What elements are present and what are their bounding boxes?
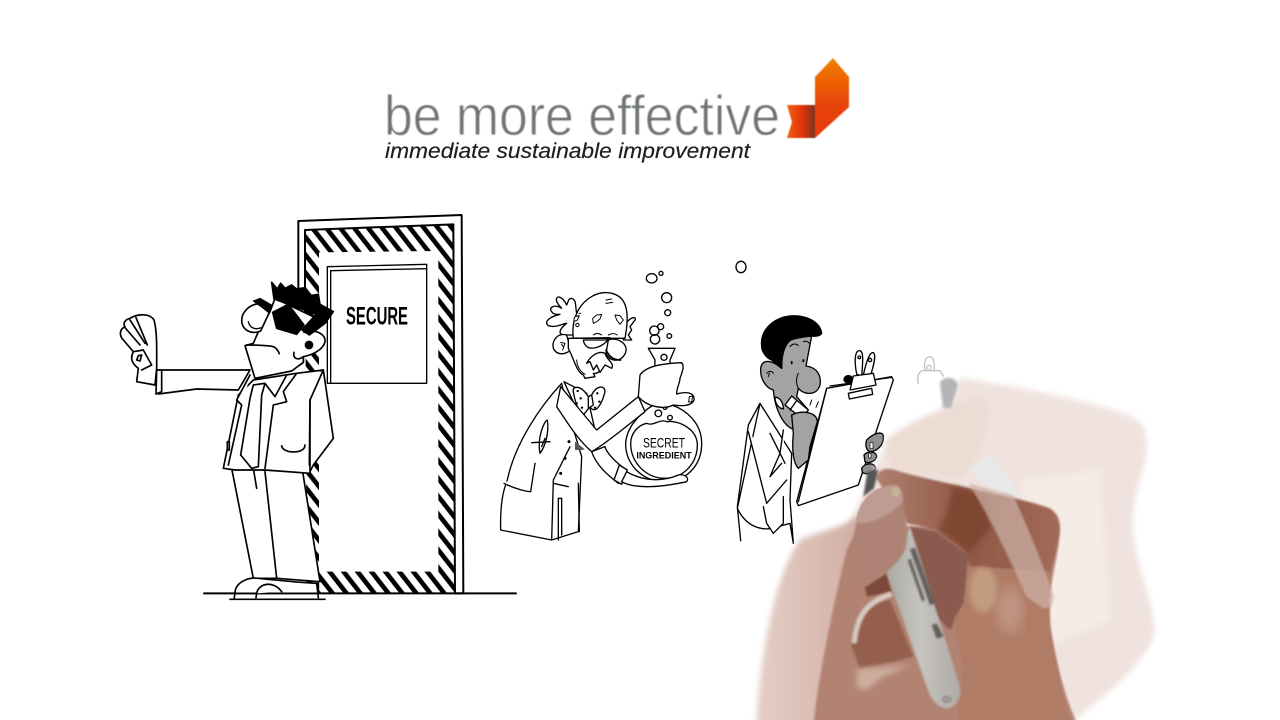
hand at mouth bbox=[792, 412, 817, 468]
ghost finger overlay bbox=[968, 483, 1054, 608]
door frame bbox=[298, 215, 463, 593]
hazard stripes bbox=[305, 224, 455, 593]
hair left bbox=[547, 297, 577, 335]
raised hand bbox=[120, 315, 157, 385]
shadow under thumb bbox=[865, 573, 892, 597]
secure sign: SECURE bbox=[346, 302, 408, 330]
scientist with flask bbox=[501, 261, 746, 540]
body and shirt bbox=[737, 403, 793, 543]
ghost marker bbox=[968, 455, 1020, 495]
guard head bbox=[242, 282, 333, 378]
mustache bbox=[587, 352, 612, 372]
lab coat bbox=[501, 383, 585, 540]
tie bbox=[241, 383, 265, 468]
nose bbox=[242, 304, 270, 332]
collar lapel bbox=[228, 373, 297, 468]
hair bbox=[272, 282, 333, 335]
collar bbox=[564, 382, 595, 430]
arm holding flask bbox=[557, 363, 694, 487]
logo tagline: immediate sustainable improvement bbox=[385, 139, 751, 163]
dark crease bbox=[938, 487, 990, 552]
mouth bbox=[247, 345, 279, 354]
extended arm bbox=[157, 370, 250, 394]
facial details bbox=[767, 341, 809, 388]
head and bow tie bbox=[547, 293, 635, 430]
nose bbox=[606, 339, 626, 360]
thumb bbox=[853, 485, 907, 587]
bow tie bbox=[573, 387, 605, 415]
ear bbox=[294, 331, 325, 365]
eyebrow bbox=[253, 298, 272, 312]
logo ribbon icon bbox=[787, 58, 849, 138]
bald dome bbox=[573, 293, 627, 338]
lower right palm bbox=[953, 567, 1070, 720]
flask label: SECRET bbox=[643, 434, 685, 450]
arm behind back bbox=[263, 370, 333, 472]
main palm bbox=[813, 523, 1078, 720]
marker body bbox=[887, 527, 960, 708]
jacket bbox=[223, 370, 323, 473]
ground line bbox=[204, 590, 516, 596]
hair right bbox=[623, 318, 635, 340]
trousers bbox=[232, 468, 320, 582]
hair bbox=[761, 316, 822, 368]
secure door with guard bbox=[120, 215, 516, 599]
faded motion ghost of hand bbox=[850, 378, 1155, 720]
flask label: INGREDIENT bbox=[636, 450, 692, 460]
jaw and neck bbox=[568, 338, 617, 378]
ear bbox=[553, 335, 571, 354]
secure sign bbox=[327, 264, 427, 383]
pale skin fold bbox=[854, 594, 892, 643]
analyst with clipboard bbox=[737, 316, 893, 543]
knuckle highlight bbox=[969, 567, 997, 613]
flask bbox=[626, 348, 702, 482]
logo bbox=[384, 58, 849, 163]
lower pale knuckle bbox=[857, 665, 910, 690]
glasses bbox=[573, 338, 610, 348]
pale back of hand bbox=[757, 515, 890, 720]
marker tip bbox=[863, 469, 878, 497]
drawing hand bbox=[757, 378, 1155, 720]
partly drawn figure bbox=[918, 357, 943, 383]
palm opening bbox=[852, 600, 913, 668]
logo wordmark: be more effective bbox=[384, 84, 780, 147]
face bbox=[245, 298, 317, 378]
face bbox=[761, 336, 820, 430]
shoes bbox=[235, 578, 318, 593]
sunglasses bbox=[273, 304, 304, 334]
fingers gripping clipboard bbox=[862, 433, 883, 474]
upper finger bbox=[876, 469, 1060, 573]
front hand, drawn in hand-local coordinates bbox=[757, 469, 1078, 720]
analyst head bbox=[761, 316, 822, 430]
flask label bbox=[636, 434, 692, 460]
bubbles bbox=[646, 261, 746, 344]
guard figure bbox=[120, 282, 333, 599]
inner shadow bbox=[910, 527, 968, 630]
clipboard bbox=[797, 351, 893, 506]
